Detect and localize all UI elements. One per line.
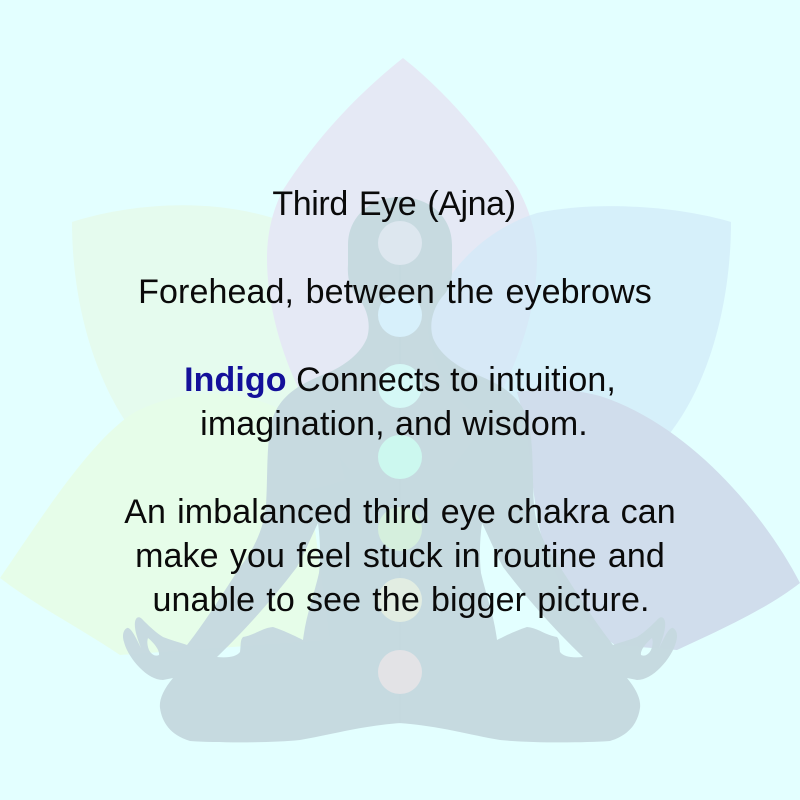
chakra: throat xyxy=(378,364,422,408)
chakra: crown xyxy=(378,221,422,265)
text: imbalance description xyxy=(124,493,676,619)
text: colour and meaning xyxy=(184,361,616,443)
chakra circles xyxy=(378,221,422,694)
petal: upper left xyxy=(72,205,345,493)
meditating figure silhouette xyxy=(123,197,677,742)
text: imbalance description: An imbalanced third eye chakra can xyxy=(124,493,676,531)
petal: lower left xyxy=(0,394,330,655)
chakra: third eye xyxy=(378,293,422,337)
figure: right half xyxy=(399,197,677,742)
text: imbalance description: make you feel stuck in routine and xyxy=(135,537,665,575)
petal: lower right xyxy=(517,389,800,650)
chakra: solar plexus xyxy=(378,507,422,551)
chakra: root xyxy=(378,650,422,694)
text: colour and meaning: imagination, and wisdom. xyxy=(200,405,588,443)
chakra: sacral xyxy=(378,578,422,622)
figure: left half xyxy=(123,197,401,742)
petal: top xyxy=(267,58,537,470)
text: location: Forehead, between the eyebrows xyxy=(138,273,652,311)
petal: upper right xyxy=(428,206,731,445)
text: imbalance description: unable to see the bigger picture. xyxy=(152,581,650,619)
chakra: heart xyxy=(378,435,422,479)
text: colour and meaning: Indigo Connects to intuition, xyxy=(184,361,616,399)
heading: chakra name: Third Eye (Ajna) xyxy=(272,185,516,223)
